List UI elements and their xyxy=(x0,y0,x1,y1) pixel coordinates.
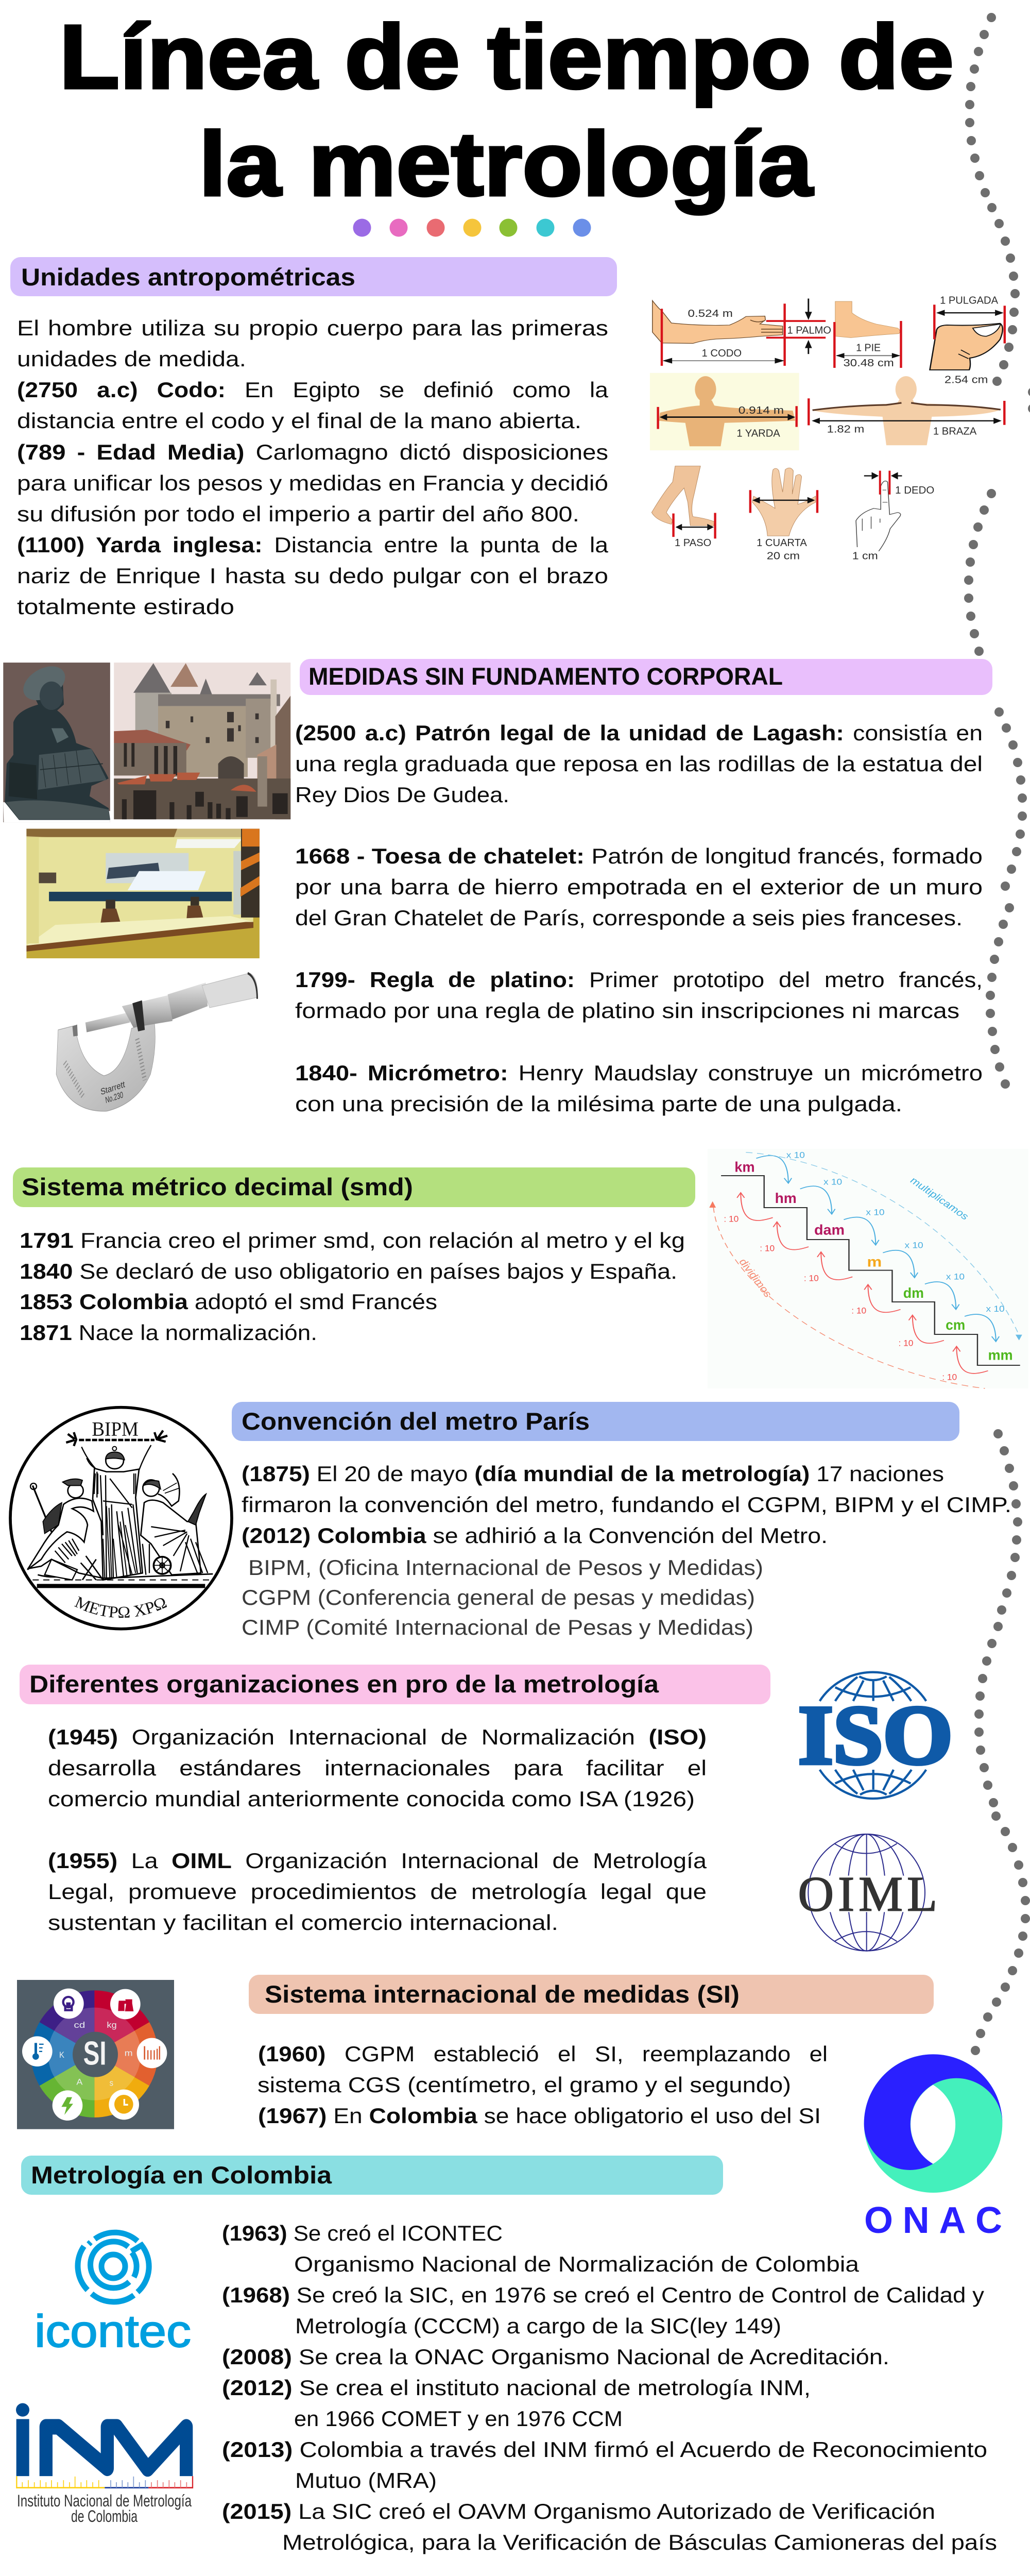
text block: ISO: (1945) Organización Internacional de Normalización (ISO) xyxy=(48,1725,707,1749)
thumb with pulgada xyxy=(930,294,1005,385)
text block: toesa de chatelet: por una barra de hierro empotrada en el exterior de un muro xyxy=(295,875,983,899)
arm with codo and palmo: 1 PALMO xyxy=(787,324,831,336)
panel: sistema internacional xyxy=(249,1975,934,2128)
heading: metrología en Colombia xyxy=(21,2156,723,2195)
text block: smd: 1840 Se declaró de uso obligatorio en países bajos y España. xyxy=(20,1259,677,1283)
foot with pie: 1 PIE xyxy=(856,342,881,353)
heading: medidas sin fundamento corporal: MEDIDAS SIN FUNDAMENTO CORPORAL xyxy=(308,663,783,690)
text block: colombia timeline: (1968) Se creó la SIC, en 1976 se creó el Centro de Control de Calidad y xyxy=(222,2283,984,2307)
panel: convención del metro xyxy=(232,1402,1011,1639)
text block: convención: (2012) Colombia se adhirió a la Convención del Metro. xyxy=(242,1523,828,1548)
text block: acronyms: CIMP (Comité Internacional de Pesas y Medidas) xyxy=(242,1615,753,1639)
dedo hand xyxy=(852,471,934,562)
text block: regla de platino: formado por una regla de platino sin inscripciones ni marcas xyxy=(295,998,959,1023)
illustration: anthropometric units xyxy=(650,294,1005,562)
diagram: metric staircase: : 10 xyxy=(898,1338,913,1348)
heading: sistema internacional: Sistema internacional de medidas (SI) xyxy=(265,1980,740,2008)
heading: organizaciones: Diferentes organizaciones en pro de la metrología xyxy=(29,1670,659,1698)
diagram: metric staircase: x 10 xyxy=(905,1240,923,1250)
diagram: metric staircase xyxy=(708,1149,1028,1388)
cuarta hand: 1 CUARTA xyxy=(757,536,807,548)
heading: organizaciones xyxy=(20,1665,770,1704)
text block: regla de platino: 1799- Regla de platino: Primer prototipo del metro francés, xyxy=(295,968,983,992)
right figure xyxy=(141,1473,208,1575)
text block: colombia timeline: en 1966 COMET y en 1976 CCM xyxy=(294,2406,623,2431)
icon: SI wheel: A xyxy=(76,2077,83,2087)
text block: lagash: una regla graduada que reposa en las rodillas de la estatua del xyxy=(295,752,983,776)
icon: bulb xyxy=(63,1997,74,2010)
photo: micrometer: Starrett xyxy=(100,1080,126,1097)
diagram: metric staircase: x 10 xyxy=(786,1150,805,1160)
heading: sistema métrico decimal xyxy=(13,1167,695,1207)
dedo hand: 1 DEDO xyxy=(895,484,934,496)
text block: micrometro: con una precisión de la milésima parte de una pulgada. xyxy=(295,1092,902,1116)
panel: medidas sin fundamento corporal xyxy=(295,659,992,1116)
central figure xyxy=(93,1447,143,1580)
diagram: metric staircase: x 10 xyxy=(986,1304,1005,1314)
foot with pie xyxy=(834,301,901,369)
diagram: metric staircase: x 10 xyxy=(866,1207,885,1217)
panel: organizaciones xyxy=(20,1665,770,1935)
diagram: metric staircase: dm xyxy=(903,1285,924,1301)
text block: ISO xyxy=(48,1725,707,1811)
panel: sistema métrico decimal xyxy=(13,1167,695,1345)
diagram: metric staircase: : 10 xyxy=(804,1273,819,1283)
logo: INM xyxy=(16,2403,193,2526)
text block: unidades antropométricas: unidades de medida. xyxy=(17,347,246,371)
title: Línea de tiempo de xyxy=(59,7,954,108)
thumb with pulgada: 1 PULGADA xyxy=(940,294,998,306)
braza figure: 1.82 m xyxy=(827,423,864,435)
text block: colombia timeline: (2013) Colombia a través del INM firmó el Acuerdo de Reconocimiento xyxy=(222,2437,987,2462)
text block: OIML: Legal, promueve procedimientos de metrología legal que xyxy=(48,1879,707,1904)
left figure (Mercury) xyxy=(27,1479,94,1580)
ground line art xyxy=(27,1544,213,1580)
logo: BIPM seal: BIPM xyxy=(92,1418,139,1440)
icon: SI wheel: s xyxy=(110,2078,113,2088)
text block: acronyms: CGPM (Conferencia general de pesas y medidas) xyxy=(242,1585,755,1609)
text block: colombia timeline: Metrológica, para la Verificación de Básculas Camioneras del país xyxy=(282,2530,997,2554)
photo: statue of Gudea xyxy=(3,660,110,822)
logo: OIML xyxy=(798,1834,937,1951)
icon: SI wheel: cd xyxy=(74,2020,85,2030)
icon: bolt xyxy=(61,2097,73,2115)
text block: toesa de chatelet: 1668 - Toesa de chatelet: Patrón de longitud francés, formado xyxy=(295,844,983,868)
text block: convención: firmaron la convención del metro, fundando el CGPM, BIPM y el CIMP. xyxy=(242,1493,1011,1517)
text block: colombia timeline: (2012) Se crea el instituto nacional de metrología INM, xyxy=(222,2376,811,2400)
text block: OIML: (1955) La OIML Organización Internacional de Metrología xyxy=(48,1849,707,1873)
paso legs: 1 PASO xyxy=(675,536,711,548)
dotted timeline path xyxy=(964,13,1030,2055)
text block: micrometro: 1840- Micrómetro: Henry Maudslay construye un micrómetro xyxy=(295,1061,983,1085)
logo: icontec xyxy=(35,2232,191,2357)
text block: OIML: sustentan y facilitan el comercio internacional. xyxy=(48,1910,558,1935)
icon: clock xyxy=(114,2095,133,2114)
icon: thermometer xyxy=(32,2043,44,2060)
colored dots row xyxy=(353,218,591,237)
dedo hand: 1 cm xyxy=(852,550,878,562)
text block: smd: 1871 Nace la normalización. xyxy=(20,1320,317,1345)
text block: lagash: (2500 a.c) Patrón legal de la unidad de Lagash: consistía en xyxy=(295,721,983,745)
diagram: metric staircase: : 10 xyxy=(851,1306,866,1315)
text block: SI: (1967) En Colombia se hace obligatorio el uso del SI xyxy=(258,2104,821,2128)
diagram: metric staircase: mm xyxy=(988,1347,1013,1363)
foot with pie: 30.48 cm xyxy=(844,357,894,369)
icon: SI wheel: m xyxy=(125,2048,133,2058)
diagram: metric staircase: km xyxy=(734,1159,755,1175)
text block: convención: (1875) El 20 de mayo (día mundial de la metrología) 17 naciones xyxy=(242,1462,944,1486)
text block: micrometro xyxy=(295,1061,983,1116)
heading: sistema internacional xyxy=(249,1975,934,2014)
yarda figure xyxy=(650,373,799,450)
icon: SI wheel xyxy=(17,1980,174,2129)
cuarta hand xyxy=(750,468,817,562)
heading: sistema métrico decimal: Sistema métrico decimal (smd) xyxy=(22,1173,413,1200)
diagram: metric staircase: : 10 xyxy=(724,1214,739,1224)
text block: unidades antropométricas: totalmente estirado xyxy=(17,595,234,619)
text block: toesa de chatelet: del Gran Chatelet de París, corresponde a seis pies franceses. xyxy=(295,906,963,930)
text block: colombia timeline: (1963) Se creó el ICONTEC xyxy=(222,2221,503,2245)
diagram: metric staircase: cm xyxy=(946,1317,965,1333)
text block: OIML xyxy=(48,1849,707,1935)
panel: metrología en Colombia xyxy=(21,2156,997,2554)
thumb with pulgada: 2.54 cm xyxy=(945,374,988,385)
heading: metrología en Colombia: Metrología en Colombia xyxy=(31,2161,332,2189)
text block: unidades antropométricas: (1100) Yarda inglesa: Distancia entre la punta de la xyxy=(17,533,609,557)
photo: toesa de chatelet display xyxy=(26,829,260,958)
arm with codo and palmo: 0.524 m xyxy=(688,307,733,319)
text block: unidades antropométricas: su difusión por todo el imperio a partir del año 800. xyxy=(17,502,579,526)
text block: colombia timeline: Metrología (CCCM) a cargo de la SIC(ley 149) xyxy=(295,2314,781,2338)
diagram: metric staircase: multiplicamos xyxy=(907,1176,971,1222)
text block: acronyms xyxy=(242,1555,763,1639)
text block: colombia timeline: Mutuo (MRA) xyxy=(295,2468,437,2493)
text block: unidades antropométricas: nariz de Enrique I hasta su dedo pulgar con el brazo xyxy=(17,564,608,588)
diagram: metric staircase: : 10 xyxy=(760,1243,775,1253)
logo: ONAC: ONAC xyxy=(864,2200,1002,2241)
text block: convención xyxy=(242,1462,1011,1548)
text block: lagash xyxy=(295,721,983,807)
diagram: metric staircase: x 10 xyxy=(946,1272,965,1281)
heading: unidades antropométricas: Unidades antropométricas xyxy=(21,263,355,291)
title xyxy=(59,7,954,215)
braza figure: 1 BRAZA xyxy=(933,425,977,437)
text block: unidades antropométricas: (2750 a.c) Codo: En Egipto se definió como la xyxy=(17,378,609,402)
heading: convención del metro xyxy=(232,1402,959,1441)
photo: Grand Châtelet de París xyxy=(114,663,290,819)
logo: ISO: ISO xyxy=(798,1689,953,1782)
text block: SI: sistema CGS (centímetro, el gramo y el segundo) xyxy=(258,2073,791,2097)
icon: SI wheel: K xyxy=(59,2050,64,2060)
yarda figure: 0.914 m xyxy=(739,404,784,416)
diagram: metric staircase: m xyxy=(867,1253,882,1270)
text block: ISO: desarrolla estándares internacionales para facilitar el xyxy=(48,1756,707,1780)
paso legs xyxy=(651,466,715,548)
logo: INM: Instituto Nacional de Metrología xyxy=(17,2492,192,2510)
diagram: metric staircase: dam xyxy=(814,1222,845,1238)
text block: unidades antropométricas: distancia entre el codo y el final de la mano abierta. xyxy=(17,409,581,433)
logo: BIPM seal: ΜΕΤΡΩ ΧΡΩ xyxy=(74,1596,167,1618)
banner xyxy=(66,1431,167,1470)
diagram: metric staircase: : 10 xyxy=(942,1372,957,1382)
arm with codo and palmo xyxy=(653,299,831,366)
logo: OIML: OIML xyxy=(798,1866,937,1921)
text block: smd xyxy=(20,1228,685,1345)
photo: micrometer: No.230 xyxy=(105,1090,124,1106)
text block: smd: 1853 Colombia adoptó el smd Francés xyxy=(20,1290,437,1314)
diagram: metric staircase: hm xyxy=(775,1190,797,1206)
icon: SI wheel: kg xyxy=(107,2020,117,2030)
heading: unidades antropométricas xyxy=(10,257,617,296)
diagram: metric staircase: dividimos xyxy=(736,1257,774,1299)
text block: unidades antropométricas: para unificar los pesos y medidas en Francia y decidió xyxy=(17,471,608,495)
heading: medidas sin fundamento corporal xyxy=(300,659,992,695)
text block: smd: 1791 Francia creo el primer smd, con relación al metro y el kg xyxy=(20,1228,685,1252)
heading: convención del metro: Convención del metro París xyxy=(242,1408,590,1435)
logo: ONAC xyxy=(864,2054,1002,2241)
text block: colombia timeline: (2008) Se crea la ONAC Organismo Nacional de Acreditación. xyxy=(222,2345,889,2369)
title: la metrología xyxy=(199,114,813,215)
text block: colombia timeline: Organismo Nacional de Normalización de Colombia xyxy=(294,2252,860,2276)
photo: micrometer xyxy=(56,973,258,1111)
yarda figure: 1 YARDA xyxy=(736,427,780,439)
icon: weights xyxy=(118,1999,133,2011)
text block: colombia timeline: (2015) La SIC creó el OAVM Organismo Autorizado de Verificación xyxy=(222,2499,935,2523)
text block: ISO: comercio mundial anteriormente conocida como ISA (1926) xyxy=(48,1787,695,1811)
logo: BIPM seal xyxy=(9,1405,233,1630)
logo: ISO xyxy=(798,1672,953,1799)
logo: INM: de Colombia xyxy=(71,2507,138,2526)
text block: SI xyxy=(258,2042,828,2128)
text block: unidades antropométricas xyxy=(17,316,609,619)
text block: colombia timeline xyxy=(222,2221,997,2554)
text block: lagash: Rey Dios De Gudea. xyxy=(295,783,509,807)
text block: regla de platino xyxy=(295,968,983,1023)
icon: SI wheel: SI xyxy=(83,2034,107,2072)
text block: acronyms: BIPM, (Oficina Internacional de Pesos y Medidas) xyxy=(248,1555,763,1580)
panel: unidades antropométricas xyxy=(10,257,617,619)
cuarta hand: 20 cm xyxy=(767,550,800,562)
text block: toesa de chatelet xyxy=(295,844,983,930)
text block: unidades antropométricas: (789 - Edad Media) Carlomagno dictó disposiciones xyxy=(17,440,608,464)
text block: SI: (1960) CGPM estableció el SI, reemplazando el xyxy=(258,2042,828,2066)
photos: medidas sin fundamento corporal xyxy=(3,660,290,1111)
diagram: metric staircase: x 10 xyxy=(823,1177,842,1187)
icon: ruler bars xyxy=(144,2046,160,2060)
logo: icontec: icontec xyxy=(35,2306,191,2357)
arm with codo and palmo: 1 CODO xyxy=(702,347,742,359)
text block: unidades antropométricas: El hombre utiliza su propio cuerpo para las primeras xyxy=(17,316,608,340)
braza figure xyxy=(809,376,1004,445)
